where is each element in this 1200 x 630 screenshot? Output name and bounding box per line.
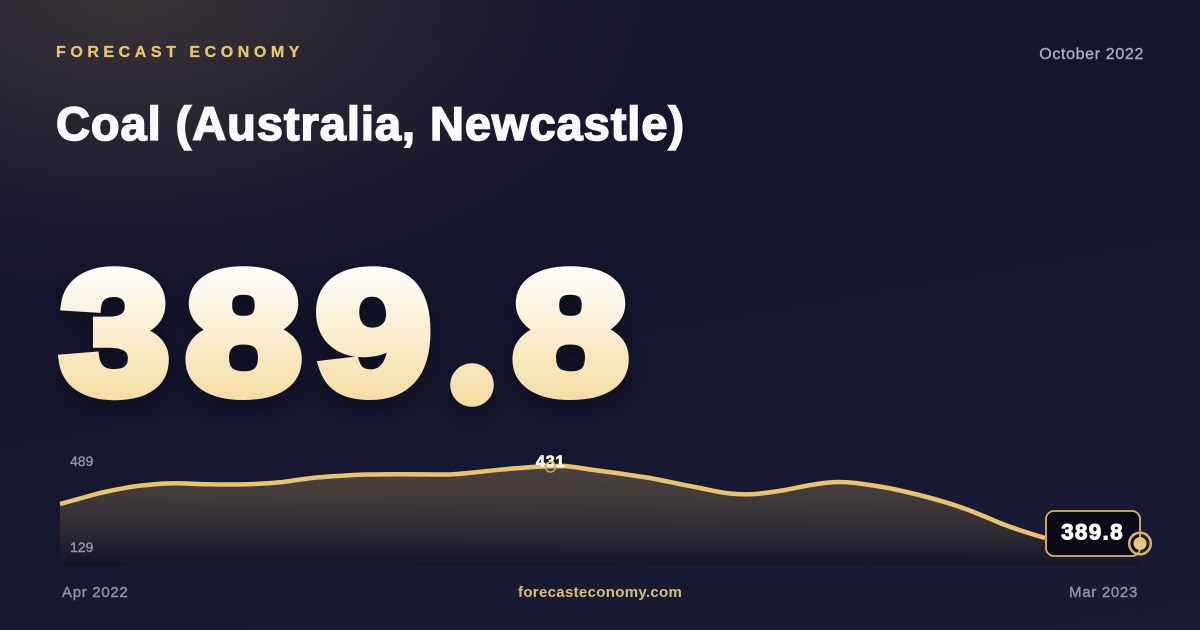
end date: Mar 2023 <box>1069 584 1138 601</box>
big value: 9 <box>316 237 431 429</box>
y axis min: 129 <box>70 539 93 555</box>
chart: price line <box>60 466 1045 538</box>
date: October 2022 <box>1039 46 1144 63</box>
end marker <box>1129 533 1151 554</box>
peak marker <box>546 462 556 472</box>
title: Coal (Australia, Newcastle) <box>56 97 685 150</box>
y axis max: 489 <box>70 453 93 469</box>
latest value callout <box>1046 511 1140 556</box>
big value: 3 <box>61 237 169 429</box>
latest value callout: 389.8 <box>1061 520 1124 544</box>
big value <box>61 237 628 433</box>
chart: area <box>60 466 1141 565</box>
website: forecasteconomy.com <box>518 584 682 601</box>
start date: Apr 2022 <box>62 584 128 601</box>
big value: 8 <box>186 237 301 429</box>
big value: 8 <box>513 237 628 429</box>
big value: . <box>448 241 496 433</box>
peak label: 431 <box>536 453 565 471</box>
brand label: FORECAST ECONOMY <box>56 44 304 61</box>
